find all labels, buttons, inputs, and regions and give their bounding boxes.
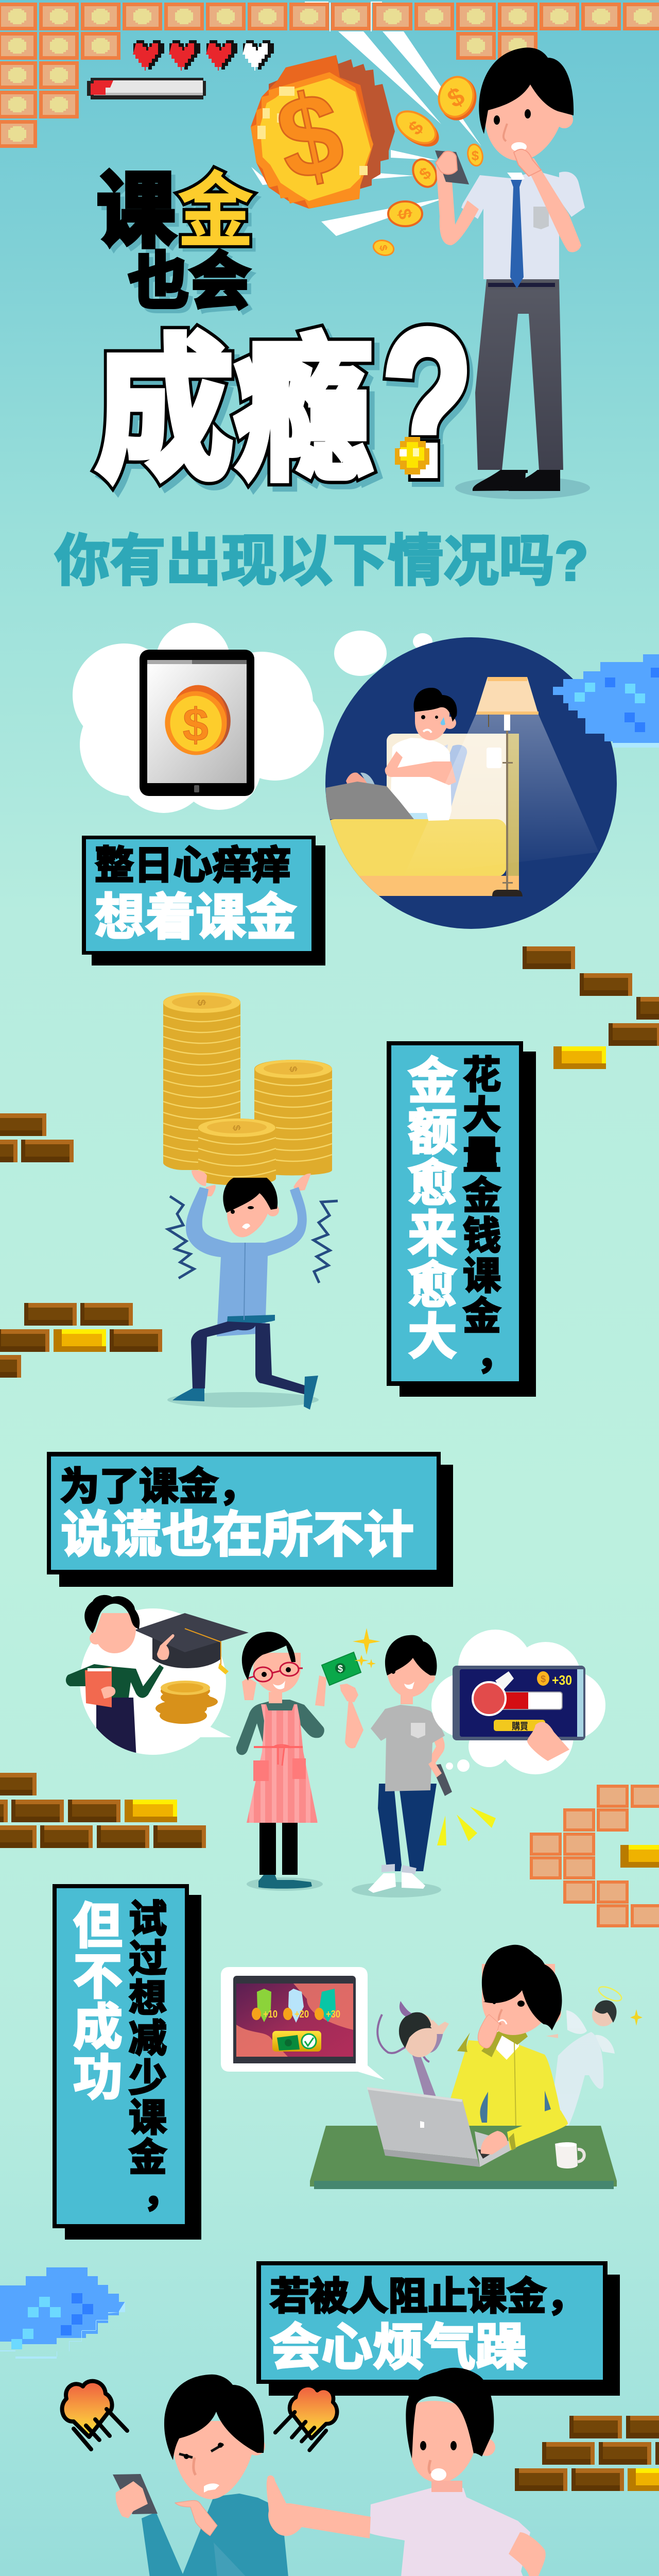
small coins: $ <box>442 81 470 113</box>
title: 成瘾?: 成瘾 <box>95 324 373 500</box>
game screen speech bubble: +20 <box>294 2009 309 2020</box>
small coins: $ <box>415 163 435 183</box>
small coins: $ <box>394 207 416 221</box>
coin stacks: $ <box>231 1125 242 1131</box>
giant pixel coin <box>251 55 395 216</box>
label: 为了课金 说谎也在所不计: 说谎也在所不计 <box>61 1507 414 1563</box>
thought cloud with game tablet: $ <box>541 1674 546 1684</box>
yellow click rays <box>437 1807 496 1845</box>
game screen speech bubble <box>221 1967 385 2080</box>
angel <box>546 1984 643 2139</box>
pixel hearts <box>133 40 274 71</box>
angry fumes <box>62 2381 337 2450</box>
title: 成瘾?: 成瘾 <box>95 324 373 500</box>
green desk <box>310 2126 617 2189</box>
label: 整日心痒痒 想着课金: 整日心痒痒 <box>95 844 291 888</box>
laptop <box>367 2087 568 2167</box>
upper right brick steps <box>523 946 659 1069</box>
hollow orange bricks right <box>530 1785 659 1927</box>
title: 课金: 金 <box>177 165 254 257</box>
man in grey t-shirt <box>340 1635 452 1897</box>
office worker with phone <box>435 47 590 499</box>
title: 成瘾?: 成瘾 <box>100 329 378 505</box>
thought cloud with game tablet <box>431 1630 605 1774</box>
section heading: 你有出现以下情况吗? <box>55 530 588 592</box>
pixel coin question-mark dot <box>395 437 429 474</box>
banknote and sparkles <box>322 1628 380 1685</box>
woman in pink apron <box>236 1632 326 1891</box>
label: 若被人阻止课金 会心烦气躁 <box>256 2261 620 2396</box>
thought cloud with tablet <box>73 623 324 813</box>
label: 试过想减少课金 但不成功: 但不成功 <box>73 1899 123 2106</box>
right bricks lower <box>515 2416 659 2491</box>
health bar <box>87 78 206 99</box>
label: 花大量金钱课金 金额愈来愈大: 金额愈来愈大 <box>408 1054 457 1365</box>
title: 成瘾?: ? <box>386 292 476 523</box>
label: 花大量金钱课金 金额愈来愈大: 花大量金钱课金 <box>463 1054 501 1337</box>
small coins: $ <box>377 244 389 252</box>
title: 也会: 也会 <box>132 251 254 320</box>
label: 试过想减少课金 但不成功: 试过想减少课金 <box>129 1897 167 2179</box>
left bricks mid <box>0 1773 206 1848</box>
coin stacks <box>163 992 332 1185</box>
speech bubble: teacher and graduation cap <box>66 1595 249 1759</box>
title: 也会: 也会 <box>128 247 250 316</box>
thought bubbles <box>334 631 432 676</box>
night scene: person in bed <box>324 637 617 929</box>
label: 若被人阻止课金 会心烦气躁: 会心烦气躁 <box>270 2319 527 2376</box>
title: 课金: 课 <box>97 165 176 257</box>
thought cloud with game tablet: +30 <box>552 1672 572 1688</box>
label: 整日心痒痒 想着课金: 想着课金 <box>95 889 297 945</box>
top orange brick wall <box>0 3 659 148</box>
coin stacks: $ <box>195 999 208 1006</box>
label: 试过想减少课金 但不成功: ， <box>143 2171 181 2214</box>
small coins: $ <box>405 117 428 139</box>
small coins <box>372 73 484 258</box>
coin stacks: $ <box>287 1066 299 1073</box>
person lifting coins <box>167 1170 319 1410</box>
title: 课金: 课金 <box>101 169 258 261</box>
man pointing <box>267 2368 546 2576</box>
title: 成瘾?: ? <box>382 287 473 518</box>
thought cloud with tablet: $ <box>182 702 210 755</box>
strain lines <box>168 1196 338 1283</box>
label: 若被人阻止课金 会心烦气躁: 若被人阻止课金， <box>270 2275 586 2318</box>
angry man with phone <box>113 2375 289 2576</box>
left bricks <box>0 1113 162 1378</box>
white impact rays behind coin <box>251 2 481 236</box>
pixel cloud right <box>553 654 659 748</box>
game screen speech bubble: +30 <box>326 2009 340 2020</box>
coffee mug <box>555 2142 584 2168</box>
label: 整日心痒痒 想着课金 <box>82 836 325 965</box>
devil <box>377 2001 449 2116</box>
thought cloud with game tablet: 購買 <box>512 1721 528 1732</box>
game screen speech bubble: +10 <box>263 2009 278 2020</box>
label: 试过想减少课金 但不成功 <box>53 1884 201 2240</box>
banknote and sparkles: $ <box>338 1664 343 1674</box>
label: 为了课金 说谎也在所不计: 为了课金， <box>60 1465 258 1508</box>
label: 花大量金钱课金 金额愈来愈大 <box>387 1041 536 1397</box>
label: 为了课金 说谎也在所不计 <box>47 1452 453 1587</box>
small coins: $ <box>472 148 479 163</box>
label: 花大量金钱课金 金额愈来愈大: ， <box>476 1333 514 1376</box>
title: 成瘾?: ? <box>382 287 473 518</box>
giant pixel coin: $ <box>266 73 358 216</box>
worried man at laptop <box>442 1945 566 2162</box>
title: 成瘾? <box>95 287 476 523</box>
pixel cloud left <box>0 2267 125 2359</box>
